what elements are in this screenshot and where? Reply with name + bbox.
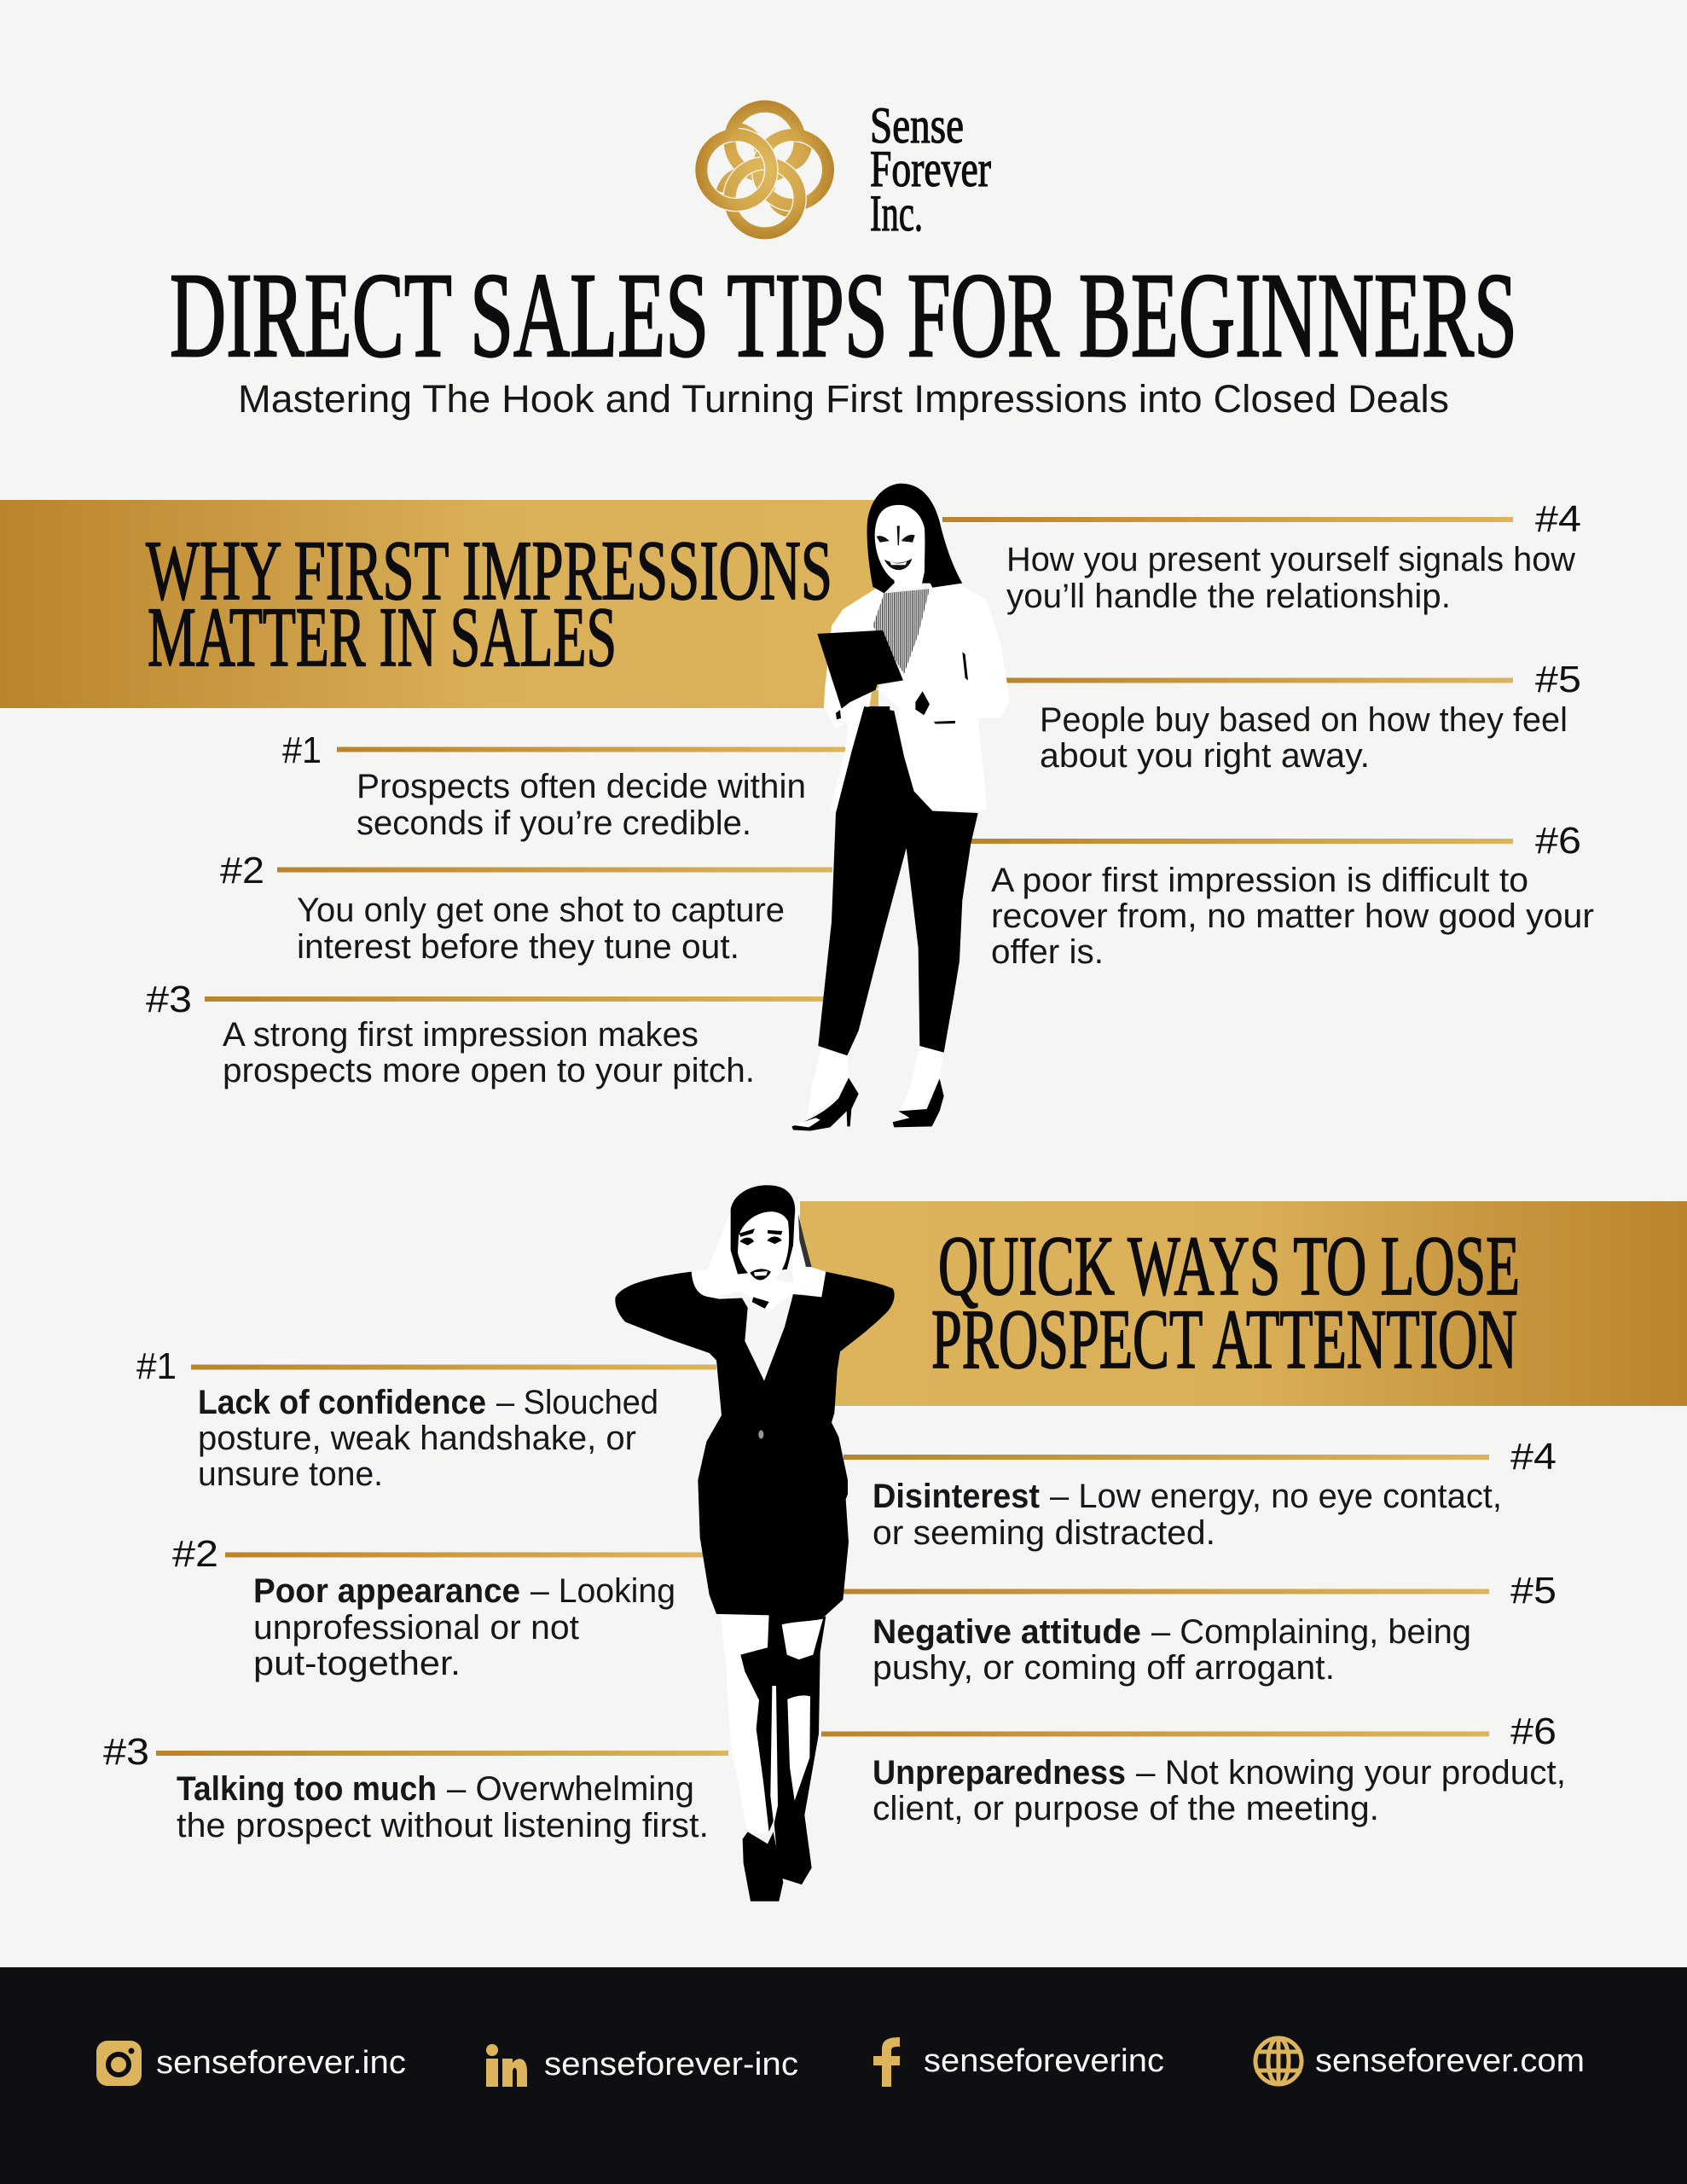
item 1: Prospects often decide within (357, 768, 806, 805)
item 3: Talking too much (177, 1770, 437, 1808)
icon: interlaced ring emblem (701, 107, 828, 233)
logo wordmark: Inc. (870, 185, 923, 241)
item 1: Lack of confidence (198, 1384, 486, 1421)
icon: instagram (96, 2041, 142, 2086)
icon: facebook (873, 2037, 900, 2087)
item 3: the prospect without listening first. (177, 1807, 709, 1844)
banner: quick ways to lose (800, 1201, 1687, 1406)
item 6: A poor first impression is difficult to (991, 862, 1528, 899)
item 2 (172, 1533, 703, 1682)
subtitle: Mastering The Hook and Turning First Impressions into Closed Deals (238, 377, 1449, 421)
item 5: pushy, or coming off arrogant. (872, 1649, 1335, 1687)
item 2: Poor appearance (253, 1572, 520, 1610)
banner: why first impressions (0, 500, 878, 708)
item 5: about you right away. (1040, 737, 1370, 775)
item 3: #3 (103, 1731, 149, 1773)
item 1 (282, 729, 845, 842)
item 4: How you present yourself signals how (1006, 541, 1575, 578)
item 4: #4 (1535, 498, 1581, 540)
heading: why first impressions: WHY FIRST IMPRESSIONS (146, 523, 832, 618)
item 3: A strong first impression makes (223, 1016, 699, 1054)
item 6: Unpreparedness (872, 1754, 1126, 1792)
item 6: – Not knowing your product, (1136, 1754, 1566, 1792)
heading: quick ways to lose (931, 1218, 1520, 1386)
item 2: You only get one shot to capture (297, 892, 785, 929)
icon: globe (1255, 2038, 1301, 2084)
item 2: put-together. (253, 1645, 461, 1682)
panel: why first impressions matter (0, 484, 1594, 1131)
panel: quick ways to lose attention (103, 1185, 1687, 1902)
item 3 (103, 1731, 728, 1844)
item 6: #6 (1535, 820, 1581, 862)
item 4: you’ll handle the relationship. (1006, 578, 1451, 615)
social: instagram: senseforever.inc (156, 2045, 406, 2081)
item 3 (146, 979, 824, 1089)
item 6: client, or purpose of the meeting. (872, 1790, 1379, 1827)
social: linkedin (486, 2044, 798, 2087)
item 4: Disinterest (872, 1478, 1040, 1515)
item 5 (844, 1570, 1557, 1687)
item 3: prospects more open to your pitch. (223, 1052, 755, 1089)
item 2: interest before they tune out. (297, 928, 739, 966)
item 4: or seeming distracted. (872, 1514, 1215, 1552)
item 3: #3 (146, 979, 192, 1020)
social: facebook (873, 2037, 1164, 2087)
item 2: #2 (220, 850, 264, 892)
item 4: – Low energy, no eye contact, (1050, 1478, 1502, 1515)
figure: overwhelmed woman covering ears (615, 1185, 895, 1902)
item 5: Negative attitude (872, 1613, 1141, 1651)
item 4 (844, 1436, 1557, 1552)
item 1: seconds if you’re credible. (357, 804, 751, 842)
social: website (1255, 2038, 1585, 2084)
item 1: posture, weak handshake, or (198, 1420, 636, 1457)
heading: why first impressions: MATTER IN SALES (148, 590, 617, 684)
item 1: unsure tone. (198, 1455, 383, 1493)
footer band (0, 1967, 1687, 2184)
icon: linkedin (486, 2044, 527, 2087)
item 6: #6 (1510, 1711, 1557, 1752)
item 5 (1005, 659, 1581, 775)
item 3: – Overwhelming (447, 1770, 694, 1808)
logo wordmark (870, 97, 991, 241)
item 6 (970, 820, 1594, 971)
item 1: – Slouched (496, 1384, 658, 1421)
social: instagram (96, 2041, 406, 2086)
social: website: senseforever.com (1315, 2043, 1585, 2079)
item 1 (136, 1345, 716, 1493)
logo wordmark: Forever (870, 141, 991, 197)
item 5: People buy based on how they feel (1040, 701, 1568, 739)
item 6 (821, 1711, 1566, 1827)
item 2: #2 (172, 1533, 218, 1575)
logo wordmark: Sense (870, 97, 964, 154)
item 4: #4 (1510, 1436, 1557, 1478)
logo (701, 97, 991, 241)
item 6: recover from, no matter how good your (991, 897, 1594, 935)
item 4 (942, 498, 1581, 615)
item 5: – Complaining, being (1151, 1613, 1471, 1651)
item 1: #1 (136, 1345, 177, 1387)
heading: why first impressions (146, 523, 832, 684)
item 1: #1 (282, 729, 322, 771)
item 2 (220, 850, 832, 966)
item 6: offer is. (991, 933, 1104, 971)
item 5: #5 (1510, 1570, 1557, 1612)
item 2: – Looking (530, 1572, 675, 1610)
social: facebook: senseforeverinc (924, 2043, 1164, 2079)
figure: businesswoman with tablet (791, 484, 1010, 1131)
item 2: unprofessional or not (253, 1609, 579, 1647)
social: linkedin: senseforever-inc (544, 2047, 798, 2082)
item 5: #5 (1535, 659, 1581, 700)
